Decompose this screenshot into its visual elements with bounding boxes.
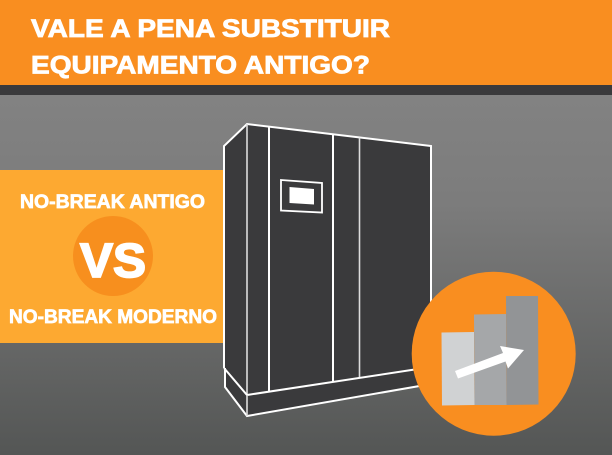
panel: comparison <box>0 170 223 343</box>
title <box>31 15 390 79</box>
arrow <box>455 346 524 378</box>
bar: medium <box>474 314 506 405</box>
label: modern UPS: NO-BREAK MODERNO <box>9 307 217 328</box>
VS badge <box>73 216 153 296</box>
background <box>0 95 612 455</box>
header banner <box>0 0 612 95</box>
bar: low <box>442 332 474 406</box>
display panel <box>281 180 322 212</box>
title: VALE A PENA SUBSTITUIR <box>31 15 390 43</box>
icon: UPS cabinet <box>224 124 431 416</box>
title: EQUIPAMENTO ANTIGO? <box>31 51 370 79</box>
cabinet outline <box>224 124 431 368</box>
VS badge: VS <box>80 235 146 288</box>
label: old UPS: NO-BREAK ANTIGO <box>20 192 205 213</box>
door dividers <box>247 124 360 395</box>
icon: growth chart badge <box>412 272 576 436</box>
cabinet base <box>224 367 431 416</box>
cabinet body <box>224 124 431 416</box>
bar: high <box>506 296 538 405</box>
